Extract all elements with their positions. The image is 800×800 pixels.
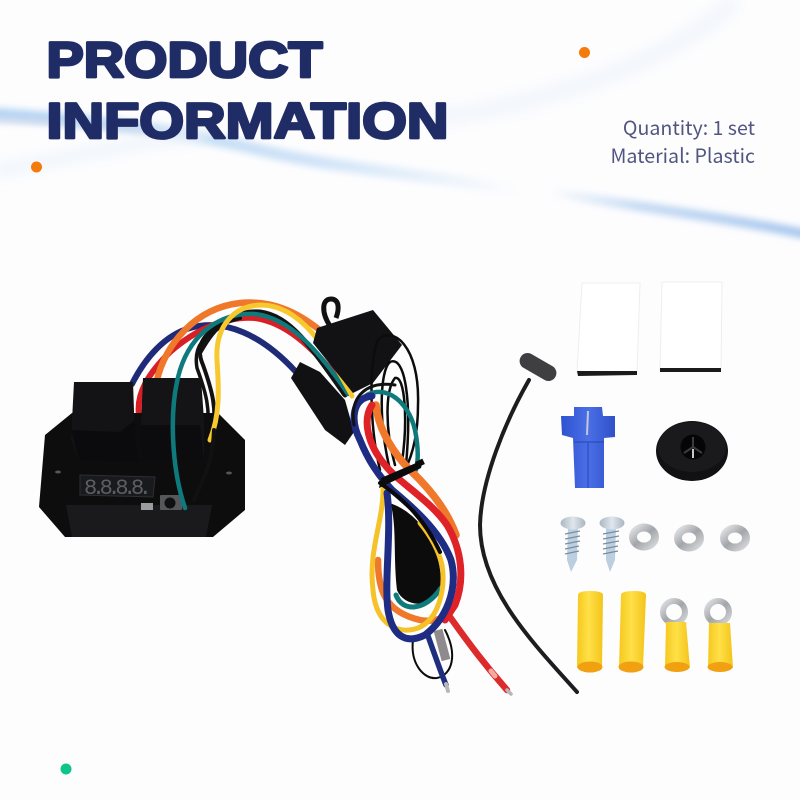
title: PRODUCT xyxy=(46,31,323,88)
ring terminal 2 xyxy=(707,601,733,672)
product specifications: Material: Plastic xyxy=(610,140,755,169)
inline connector xyxy=(291,362,354,445)
product specifications: Quantity: 1 set xyxy=(623,112,756,141)
screw 1 xyxy=(560,516,586,572)
washers xyxy=(633,528,746,548)
wire tips xyxy=(446,671,511,694)
housing front xyxy=(66,505,212,537)
mounting plate xyxy=(39,413,245,537)
control module xyxy=(39,378,245,537)
orange upper xyxy=(376,405,456,535)
yellow lower loop xyxy=(372,487,443,630)
ring terminal 1 xyxy=(663,601,690,672)
relay right xyxy=(141,378,204,462)
butt connector 1 xyxy=(577,591,603,672)
metal strands xyxy=(438,630,446,660)
screw 2 xyxy=(600,516,624,572)
wires behind module xyxy=(132,303,345,440)
adhesive pad right xyxy=(660,282,722,372)
wire bundle xyxy=(353,335,507,690)
background waves xyxy=(0,5,800,236)
push button xyxy=(160,495,182,510)
blue splice connector xyxy=(561,407,615,488)
rubber grommet xyxy=(656,421,728,481)
decorative dots xyxy=(31,47,590,774)
black arch xyxy=(353,384,395,425)
bundle zip tie xyxy=(379,459,425,488)
relay left xyxy=(71,382,139,462)
black wire in bundle xyxy=(380,483,440,552)
title xyxy=(46,31,448,149)
teal lower xyxy=(396,588,441,607)
product specifications xyxy=(610,112,756,169)
mounting holes xyxy=(55,470,232,474)
fuse hook xyxy=(324,299,338,326)
wires in front of module xyxy=(173,305,352,508)
fuse holder xyxy=(313,299,402,393)
red wire xyxy=(367,405,461,620)
sensor chip xyxy=(141,503,153,510)
display: 8.8.8.8. xyxy=(84,476,152,501)
black wire tail loop xyxy=(413,630,452,678)
black top loops xyxy=(372,335,418,470)
long cable tie xyxy=(480,350,577,692)
black mass in lower loop xyxy=(392,505,440,603)
red tail xyxy=(450,617,507,690)
teal top xyxy=(367,392,418,470)
blue tail xyxy=(427,633,446,685)
tie head xyxy=(517,350,559,384)
title: INFORMATION xyxy=(46,92,448,149)
orange lower loop xyxy=(378,560,446,621)
blue wire xyxy=(354,396,453,639)
adhesive pad left xyxy=(577,283,640,376)
butt connector 2 xyxy=(618,591,646,672)
